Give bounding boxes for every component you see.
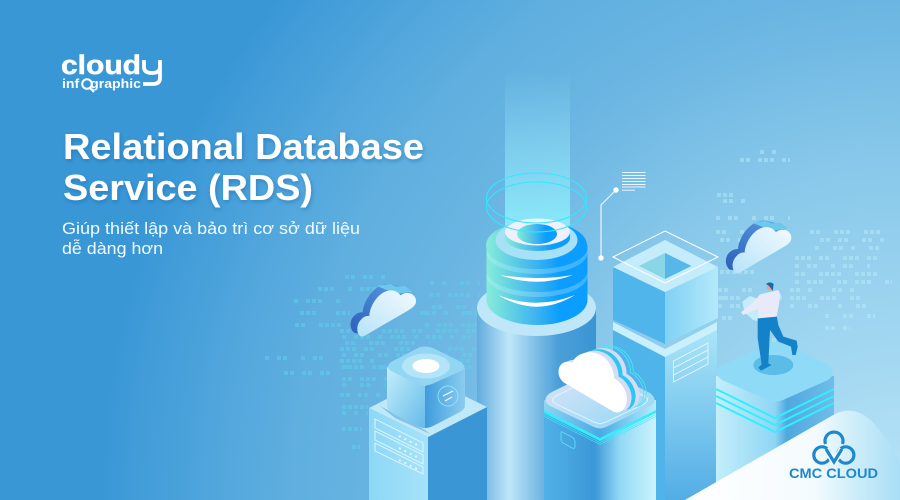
cloud left: [351, 284, 416, 337]
database stack: [486, 218, 588, 325]
corner swoosh panel: [685, 411, 900, 500]
subtitle: Giúp thiết lập và bảo trì cơ sở dữ liệu: [62, 219, 360, 238]
right platform: [716, 342, 834, 500]
left tower: [369, 378, 487, 500]
brand logo: [61, 50, 160, 92]
connector line with document icon: [598, 172, 646, 261]
cyan rings: [486, 173, 586, 232]
logo magnifier: [82, 79, 94, 92]
logo letter y: [143, 60, 160, 84]
center tower: [544, 370, 656, 500]
title: [63, 126, 424, 208]
light beam: [505, 70, 570, 240]
logo wordmark infographic: infOgraphic: [62, 77, 141, 91]
right tower: [613, 231, 718, 500]
person carrying box: [741, 282, 798, 375]
CMC cloud logo: [789, 432, 878, 481]
pixel data pattern left: [265, 277, 480, 447]
logo wordmark cloudy: cloud: [61, 50, 141, 80]
cloud right: [726, 221, 791, 273]
title: Service (RDS): [63, 167, 313, 208]
logo mark: [814, 432, 854, 463]
central column: [477, 280, 596, 500]
subtitle: dễ dàng hơn: [62, 239, 163, 258]
subtitle: [62, 219, 360, 258]
cloud on center tower: [558, 346, 646, 413]
cube on left tower: [387, 346, 465, 428]
title: Relational Database: [63, 126, 424, 167]
pixel data pattern right: [716, 152, 892, 340]
logo wordmark: CMC CLOUD: [789, 465, 878, 481]
